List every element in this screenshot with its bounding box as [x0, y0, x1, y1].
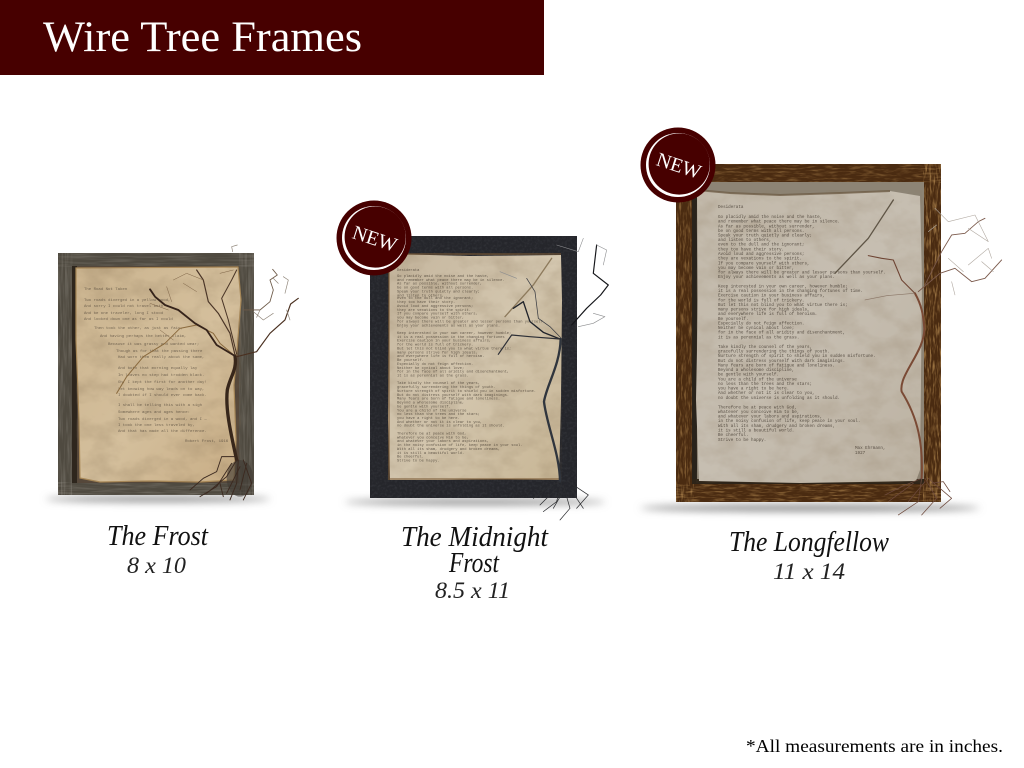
typed poem: I shall be telling this with a sigh — [118, 403, 203, 408]
typed poem: Enjoy your achievements as well as your plans. — [397, 323, 500, 328]
typed poem: Avoid loud and aggressive persons; — [718, 252, 804, 257]
typed poem: Exercise caution in your business affairs, — [397, 339, 491, 344]
typed poem: If you compare yourself with others, — [718, 261, 810, 266]
typed poem: for in the face of all aridity and disenchantment, — [397, 370, 509, 375]
badge: NEW: NEW — [350, 222, 400, 257]
typed poem: in the noisy confusion of life, keep peace in your soul. — [718, 419, 860, 424]
typed poem: 1927 — [855, 451, 866, 456]
typed poem: And both that morning equally lay — [118, 366, 198, 371]
typed poem: Especially do not feign affection. — [718, 321, 804, 326]
typed poem: Be cheerful. — [718, 433, 749, 438]
typed poem: As far as possible, without surrender, — [397, 282, 482, 287]
typed poem: no less than the trees and the stars; — [397, 412, 480, 417]
typed poem: it is a real possession in the changing fortunes — [397, 335, 505, 340]
typed poem: no less than the trees and the stars; — [718, 382, 812, 387]
aged paper — [696, 190, 922, 483]
size: 8.5 x 11 — [435, 578, 510, 603]
typed poem: for always there will be greater and lesser persons than yourself. — [718, 271, 886, 276]
frame shadow — [640, 504, 980, 512]
typed poem: they are vexations to the spirit. — [397, 308, 471, 313]
badge: NEW: NEW — [654, 149, 704, 184]
typed poem: even to the dull and the ignorant; — [397, 296, 473, 301]
typed poem: Yet knowing how way leads on to way, — [118, 387, 204, 392]
size: 8 x 10 — [127, 553, 187, 578]
typed poem: Beyond a wholesome discipline, — [397, 401, 464, 406]
typed poem: Though as for that the passing there — [116, 349, 203, 354]
size: 11 x 14 — [773, 559, 845, 584]
typed poem: and whatever your labors and aspirations, — [397, 439, 489, 444]
typed poem: Therefore be at peace with God, — [718, 405, 797, 410]
typed poem: for always there will be greater and lesser persons than yourself. — [397, 319, 545, 324]
typed poem: Especially do not feign affection. — [397, 362, 473, 367]
typed poem: gracefully surrendering the things of youth. — [397, 385, 496, 390]
typed poem: Two roads diverged in a wood, and I — — [118, 417, 207, 422]
typed poem: they too have their story. — [397, 300, 455, 305]
wire tree — [498, 238, 608, 520]
frame shadow — [46, 496, 270, 502]
typed poem: With all its sham, drudgery and broken dreams, — [397, 447, 500, 452]
typed poem: many persons strive for high ideals, — [397, 350, 478, 355]
typed poem: Neither be cynical about love; — [397, 366, 464, 371]
typed poem: Because it was grassy and wanted wear; — [108, 342, 199, 347]
typed poem: no doubt the universe is unfolding as it should. — [718, 396, 840, 401]
typed poem: you may become vain or bitter, — [397, 316, 464, 321]
typed poem: Beyond a wholesome discipline, — [718, 368, 794, 373]
typed poem: But do not distress yourself with dark imaginings. — [397, 393, 509, 398]
typed poem: Be yourself. — [718, 317, 749, 322]
frame shadow — [345, 499, 605, 505]
typed poem: And be one traveler, long I stood — [84, 311, 164, 316]
typed poem: And whether or not it is clear to you, — [397, 420, 482, 425]
typed poem: Take kindly the counsel of the years, — [397, 381, 480, 386]
typed poem: Nurture strength of spirit to shield you in sudden misfortune. — [397, 389, 536, 394]
typed poem: I took the one less traveled by, — [118, 423, 195, 428]
typed poem: But let this not blind you to what virtue there is; — [718, 303, 848, 308]
typed poem: As far as possible, without surrender, — [718, 224, 815, 229]
panel: The Longfellow — [640, 128, 1002, 584]
typed poem: and listen to others, — [718, 238, 771, 243]
typed poem: many persons strive for high ideals, — [718, 308, 810, 313]
typed poem: whatever you conceive Him to be, — [718, 410, 799, 415]
typed poem: Desiderata — [718, 205, 744, 210]
typed poem: for the world is full of trickery. — [397, 343, 473, 348]
badge: NEW — [336, 200, 412, 276]
typed poem — [84, 287, 229, 444]
typed poem: it is as perennial as the grass. — [718, 335, 799, 340]
typed poem: With all its sham, drudgery and broken dreams, — [718, 424, 835, 429]
wire tree — [117, 245, 298, 500]
typed poem: And whether or not it is clear to you, — [718, 391, 815, 396]
typed poem: it is as perennial as the grass. — [397, 374, 469, 378]
typed poem: You are a child of the universe — [718, 377, 797, 382]
typed poem: Speak your truth quietly and clearly; — [718, 234, 812, 239]
typed poem: Strive to be happy. — [718, 438, 766, 443]
typed poem — [397, 268, 545, 463]
typed poem: and listen to others, — [397, 293, 444, 298]
typed poem: Strive to be happy. — [397, 459, 440, 463]
frame name: The Midnight — [401, 522, 549, 553]
typed poem: Robert Frost, 1916 — [185, 439, 229, 444]
typed poem: Desiderata — [397, 268, 420, 273]
typed poem: Oh, I kept the first for another day! — [118, 380, 207, 385]
typed poem: no doubt the universe is unfolding as it should. — [397, 424, 505, 429]
typed poem: Take kindly the counsel of the years, — [718, 345, 812, 350]
typed poem: and everywhere life is full of heroism. — [718, 312, 817, 317]
typed poem: And sorry I could not travel both — [84, 304, 164, 309]
footnote: *All measurements are in inches. — [746, 736, 1003, 756]
typed poem: Be cheerful. — [397, 455, 424, 460]
typed poem: In leaves no step had trodden black. — [118, 373, 204, 378]
typed poem: and remember what peace there may be in silence. — [718, 220, 840, 225]
typed poem: But do not distress yourself with dark imaginings. — [718, 359, 845, 364]
aged paper — [388, 254, 562, 480]
typed poem: I doubted if I should ever come back. — [118, 393, 207, 398]
typed poem: And looked down one as far as I could — [84, 317, 173, 322]
typed poem: Exercise caution in your business affairs, — [718, 294, 825, 299]
typed poem: Therefore be at peace with God, — [397, 432, 466, 436]
typed poem: they too have their story. — [718, 247, 784, 252]
typed poem: in the noisy confusion of life, keep peace in your soul. — [397, 443, 523, 448]
typed poem: you may become vain or bitter, — [718, 266, 794, 271]
typed poem: and remember what peace there may be in silence. — [397, 278, 505, 283]
brown wood frame — [676, 164, 941, 502]
typed poem: for in the face of all aridity and disenchantment, — [718, 331, 845, 336]
typed poem: Keep interested in your own career, however humble; — [397, 331, 511, 336]
typed poem: Two roads diverged in a yellow wood, — [84, 298, 170, 303]
typed poem: Many fears are born of fatigue and loneliness. — [397, 397, 500, 402]
typed poem: If you compare yourself with others, — [397, 312, 478, 317]
panel: The Midnight Frost — [336, 200, 608, 603]
typed poem: they are vexations to the spirit. — [718, 257, 802, 262]
typed poem: Then took the other, as just as fair, — [94, 326, 183, 331]
typed poem: You are a child of the universe — [397, 408, 466, 413]
typed poem: whatever you conceive Him to be, — [397, 435, 469, 440]
typed poem: and whatever your labors and aspirations, — [718, 415, 822, 420]
frame name: The Frost — [107, 521, 209, 552]
typed poem: you have a right to be here. — [397, 416, 460, 421]
frame name: The Longfellow — [729, 527, 889, 558]
typed poem: be on good terms with all persons. — [397, 286, 473, 291]
typed poem: But let this not blind you to what virtue there is; — [397, 347, 511, 351]
typed poem: be on good terms with all persons. — [718, 229, 804, 234]
typed poem — [718, 205, 886, 456]
typed poem: Somewhere ages and ages hence: — [118, 410, 190, 415]
typed poem: you have a right to be here. — [718, 387, 789, 392]
frame name second line: Frost — [448, 548, 500, 579]
typed poem: it is still a beautiful world. — [397, 451, 464, 456]
typed poem: be gentle with yourself. — [718, 373, 779, 378]
typed poem: Many fears are born of fatigue and loneliness. — [718, 363, 835, 368]
torn stain edge — [697, 190, 890, 195]
typed poem: Neither be cynical about love; — [718, 326, 794, 331]
typed poem: Avoid loud and aggressive persons; — [397, 304, 473, 309]
aged paper — [76, 267, 241, 482]
typed poem: And that has made all the difference. — [118, 429, 207, 434]
typed poem: for the world is full of trickery. — [718, 298, 804, 303]
typed poem: Be yourself. — [397, 358, 424, 363]
typed poem: Go placidly amid the noise and the haste, — [718, 215, 822, 220]
typed poem: Nurture strength of spirit to shield you in sudden misfortune. — [718, 354, 876, 359]
badge: NEW — [640, 128, 716, 202]
black frame — [370, 236, 577, 498]
wire tree — [835, 200, 1002, 515]
typed poem: even to the dull and the ignorant; — [718, 243, 804, 248]
panel: The Frost — [46, 245, 298, 578]
typed poem: gracefully surrendering the things of youth. — [718, 350, 830, 355]
typed poem: The Road Not Taken — [84, 287, 128, 292]
typed poem: Keep interested in your own career, however humble; — [718, 284, 848, 289]
typed poem: Max Ehrmann, — [855, 446, 886, 451]
heading: Wire Tree Frames — [43, 14, 362, 61]
typed poem: Had worn them really about the same, — [118, 355, 204, 360]
typed poem: be gentle with yourself. — [397, 404, 451, 409]
grey wood frame — [58, 253, 254, 495]
typed poem: Speak your truth quietly and clearly; — [397, 290, 480, 294]
typed poem: And having perhaps the better claim, — [100, 334, 186, 339]
typed poem: it is still a beautiful world. — [718, 429, 794, 434]
typed poem: it is a real possession in the changing fortunes of time. — [718, 289, 863, 294]
typed poem: Go placidly amid the noise and the haste, — [397, 274, 489, 279]
burnt paper edges — [389, 254, 561, 480]
title banner — [0, 0, 544, 75]
typed poem: and everywhere life is full of heroism. — [397, 354, 484, 359]
typed poem: Enjoy your achievements as well as your plans. — [718, 275, 835, 280]
